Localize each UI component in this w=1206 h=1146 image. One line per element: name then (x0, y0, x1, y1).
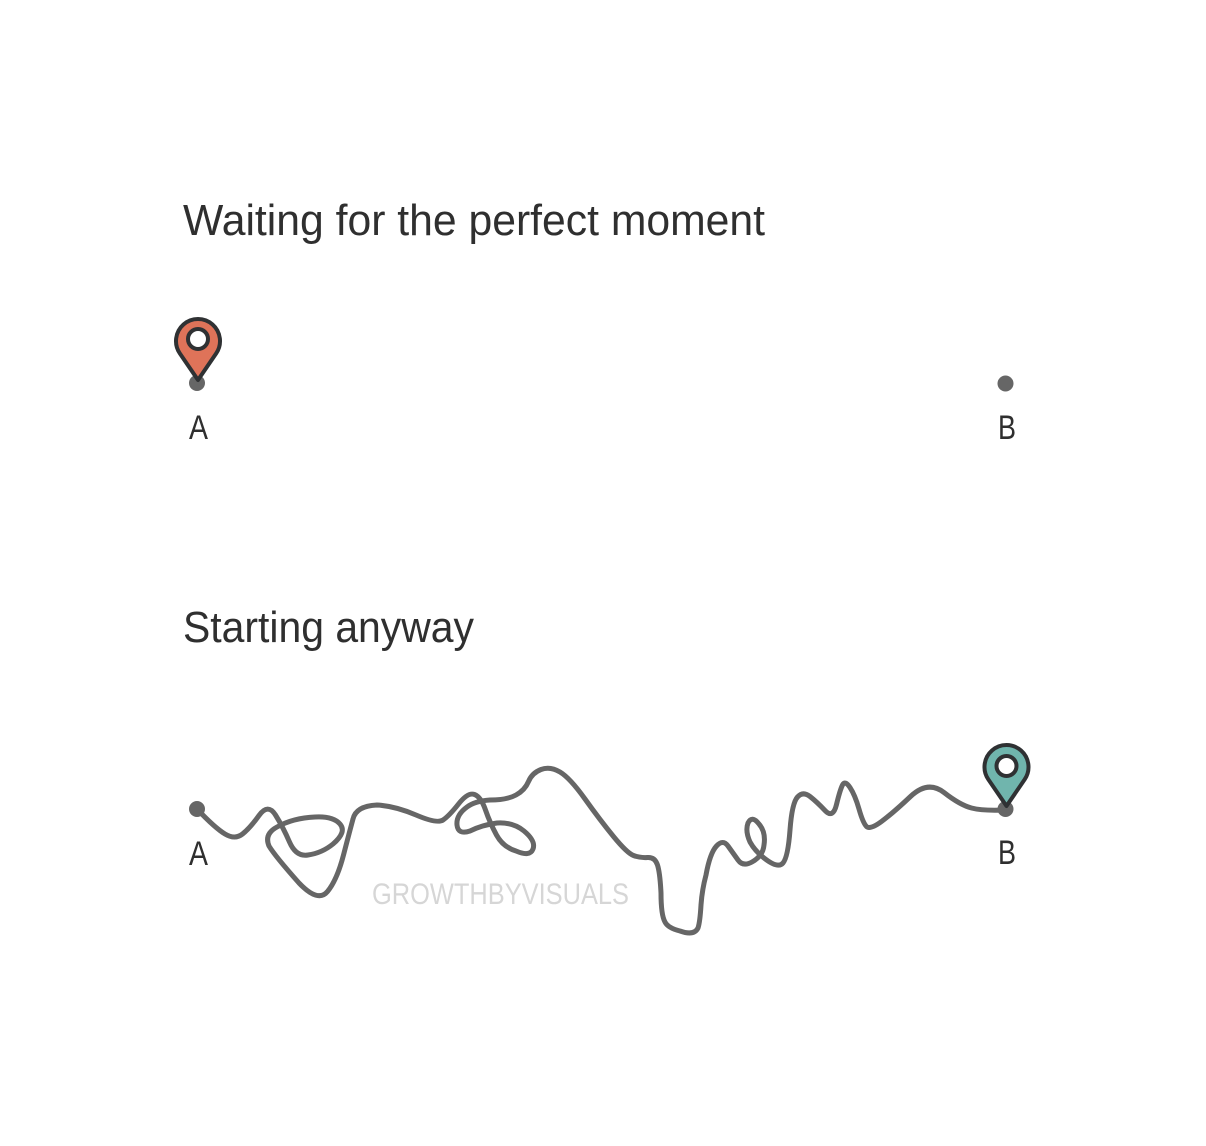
panel: starting anyway (183, 603, 1028, 933)
heading: waiting: Waiting for the perfect moment (183, 196, 765, 245)
watermark: GROWTHBYVISUALS (372, 878, 629, 911)
label A: A (189, 835, 208, 873)
point A (189, 375, 205, 391)
label B: B (998, 834, 1016, 872)
panel: waiting for the perfect moment (176, 196, 1016, 447)
heading: starting anyway: Starting anyway (183, 603, 474, 652)
winding path from A to B (197, 768, 1005, 933)
label B: B (998, 409, 1016, 447)
point B (998, 376, 1014, 392)
start point A (189, 801, 205, 817)
end point B (998, 801, 1014, 817)
label A: A (189, 409, 208, 447)
icon: red location pin (176, 319, 220, 380)
icon: teal location pin (984, 745, 1028, 806)
